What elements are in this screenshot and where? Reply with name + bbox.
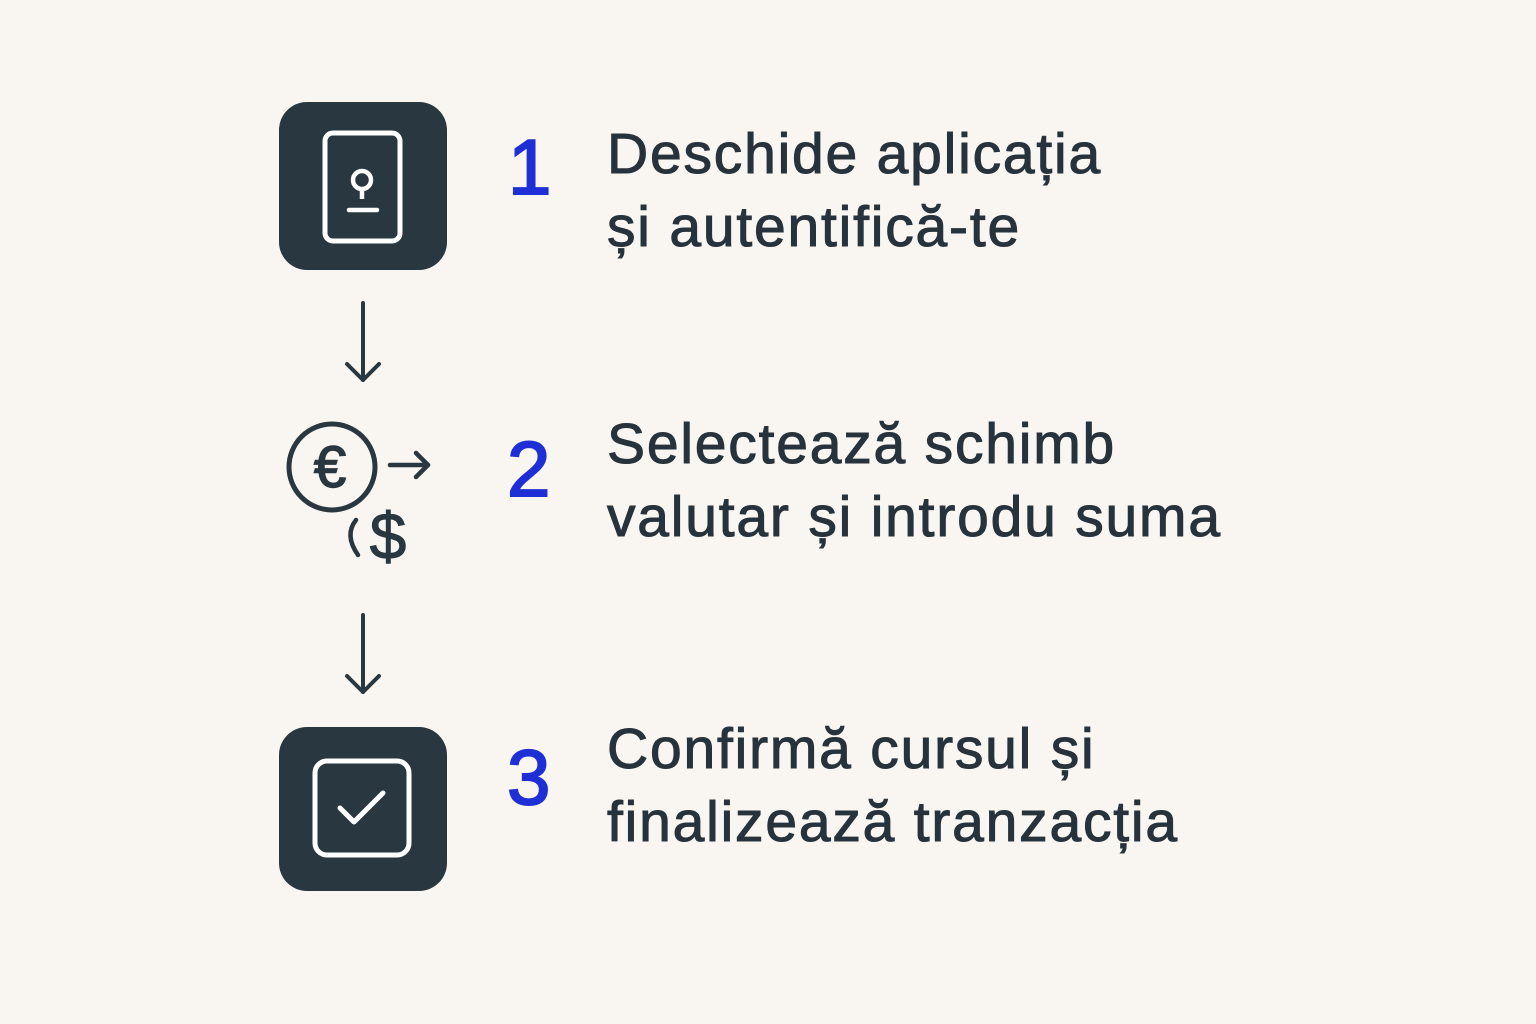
icon: checkbox confirm <box>279 727 447 891</box>
text: step 3: Confirmă cursul și <box>607 717 1096 781</box>
text: step 2: Selectează schimb <box>607 412 1116 476</box>
arrow 2 <box>344 613 382 694</box>
icon: currency exchange: € <box>314 435 346 500</box>
text: step 2 <box>606 412 1222 549</box>
text: step 1 <box>607 122 1102 259</box>
text: step 3: finalizează tranzacția <box>607 790 1179 854</box>
icon: phone login <box>279 102 447 270</box>
text: step 1: și autentifică-te <box>607 195 1021 259</box>
text: step 2: valutar și introdu suma <box>607 485 1222 549</box>
text: step 3 <box>607 717 1179 854</box>
icon: currency exchange: $ <box>370 499 406 573</box>
number 3: 3 <box>507 733 550 821</box>
arrow 1 <box>344 301 382 382</box>
number 2: 2 <box>507 425 550 513</box>
icon: currency exchange <box>286 422 430 573</box>
number 1: 1 <box>508 123 551 211</box>
text: step 1: Deschide aplicația <box>607 122 1102 186</box>
